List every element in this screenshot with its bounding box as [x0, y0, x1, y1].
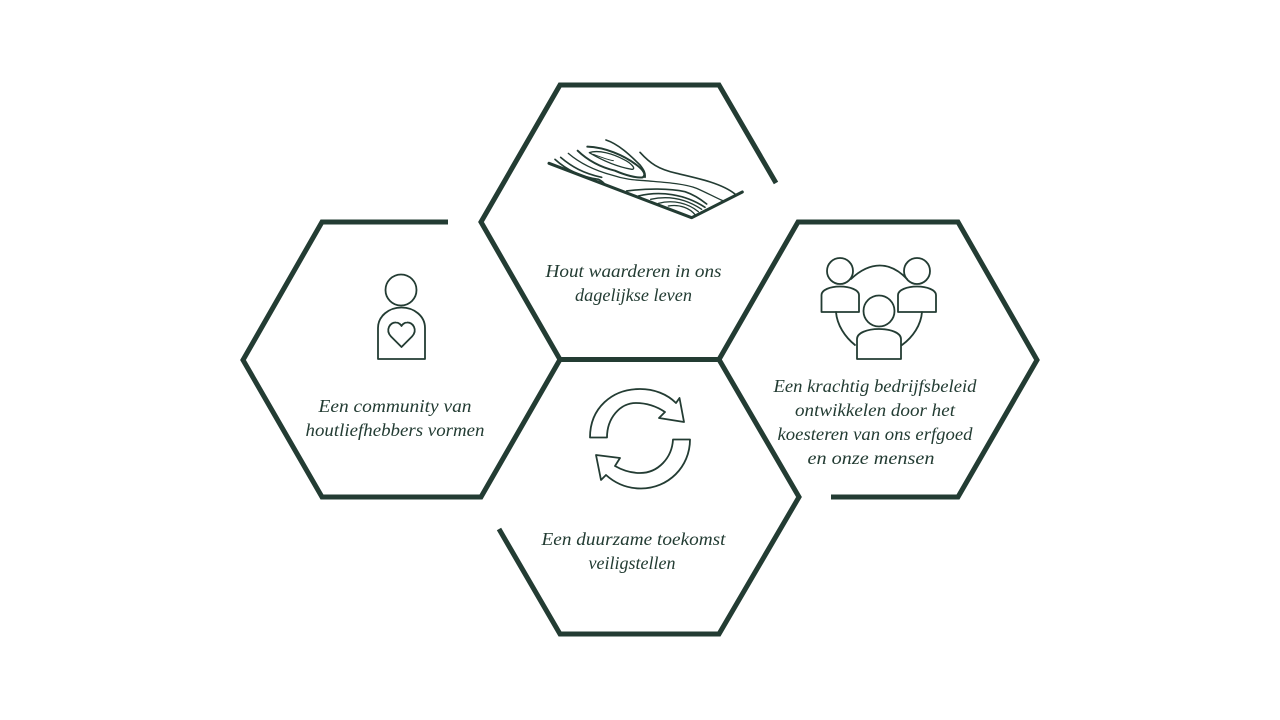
- text: left hexagon: Een community van: [317, 396, 472, 416]
- text: bottom hexagon: [540, 529, 727, 573]
- text: right hexagon: en onze mensen: [808, 448, 934, 468]
- hexagon: right: [719, 222, 1037, 497]
- text: left hexagon: houtliefhebbers vormen: [306, 420, 484, 440]
- text: right hexagon: Een krachtig bedrijfsbeleid: [772, 376, 978, 396]
- text: top hexagon: dagelijkse leven: [575, 285, 692, 305]
- text: bottom hexagon: Een duurzame toekomst: [540, 529, 727, 549]
- icon: community of people: [822, 258, 936, 359]
- hexagon: top: [481, 85, 776, 360]
- text: left hexagon: [306, 396, 484, 440]
- icon: wood grain: [549, 140, 742, 218]
- text: top hexagon: [544, 261, 722, 305]
- text: bottom hexagon: veiligstellen: [588, 553, 676, 573]
- hexagon: left: [243, 222, 560, 497]
- text: right hexagon: koesteren van ons erfgoed: [778, 424, 974, 444]
- icon: person with heart: [378, 274, 425, 359]
- hexagon: bottom: [499, 360, 799, 634]
- icon: circular arrows: [590, 389, 690, 488]
- text: right hexagon: [772, 376, 978, 468]
- text: right hexagon: ontwikkelen door het: [795, 400, 956, 420]
- text: top hexagon: Hout waarderen in ons: [544, 261, 722, 281]
